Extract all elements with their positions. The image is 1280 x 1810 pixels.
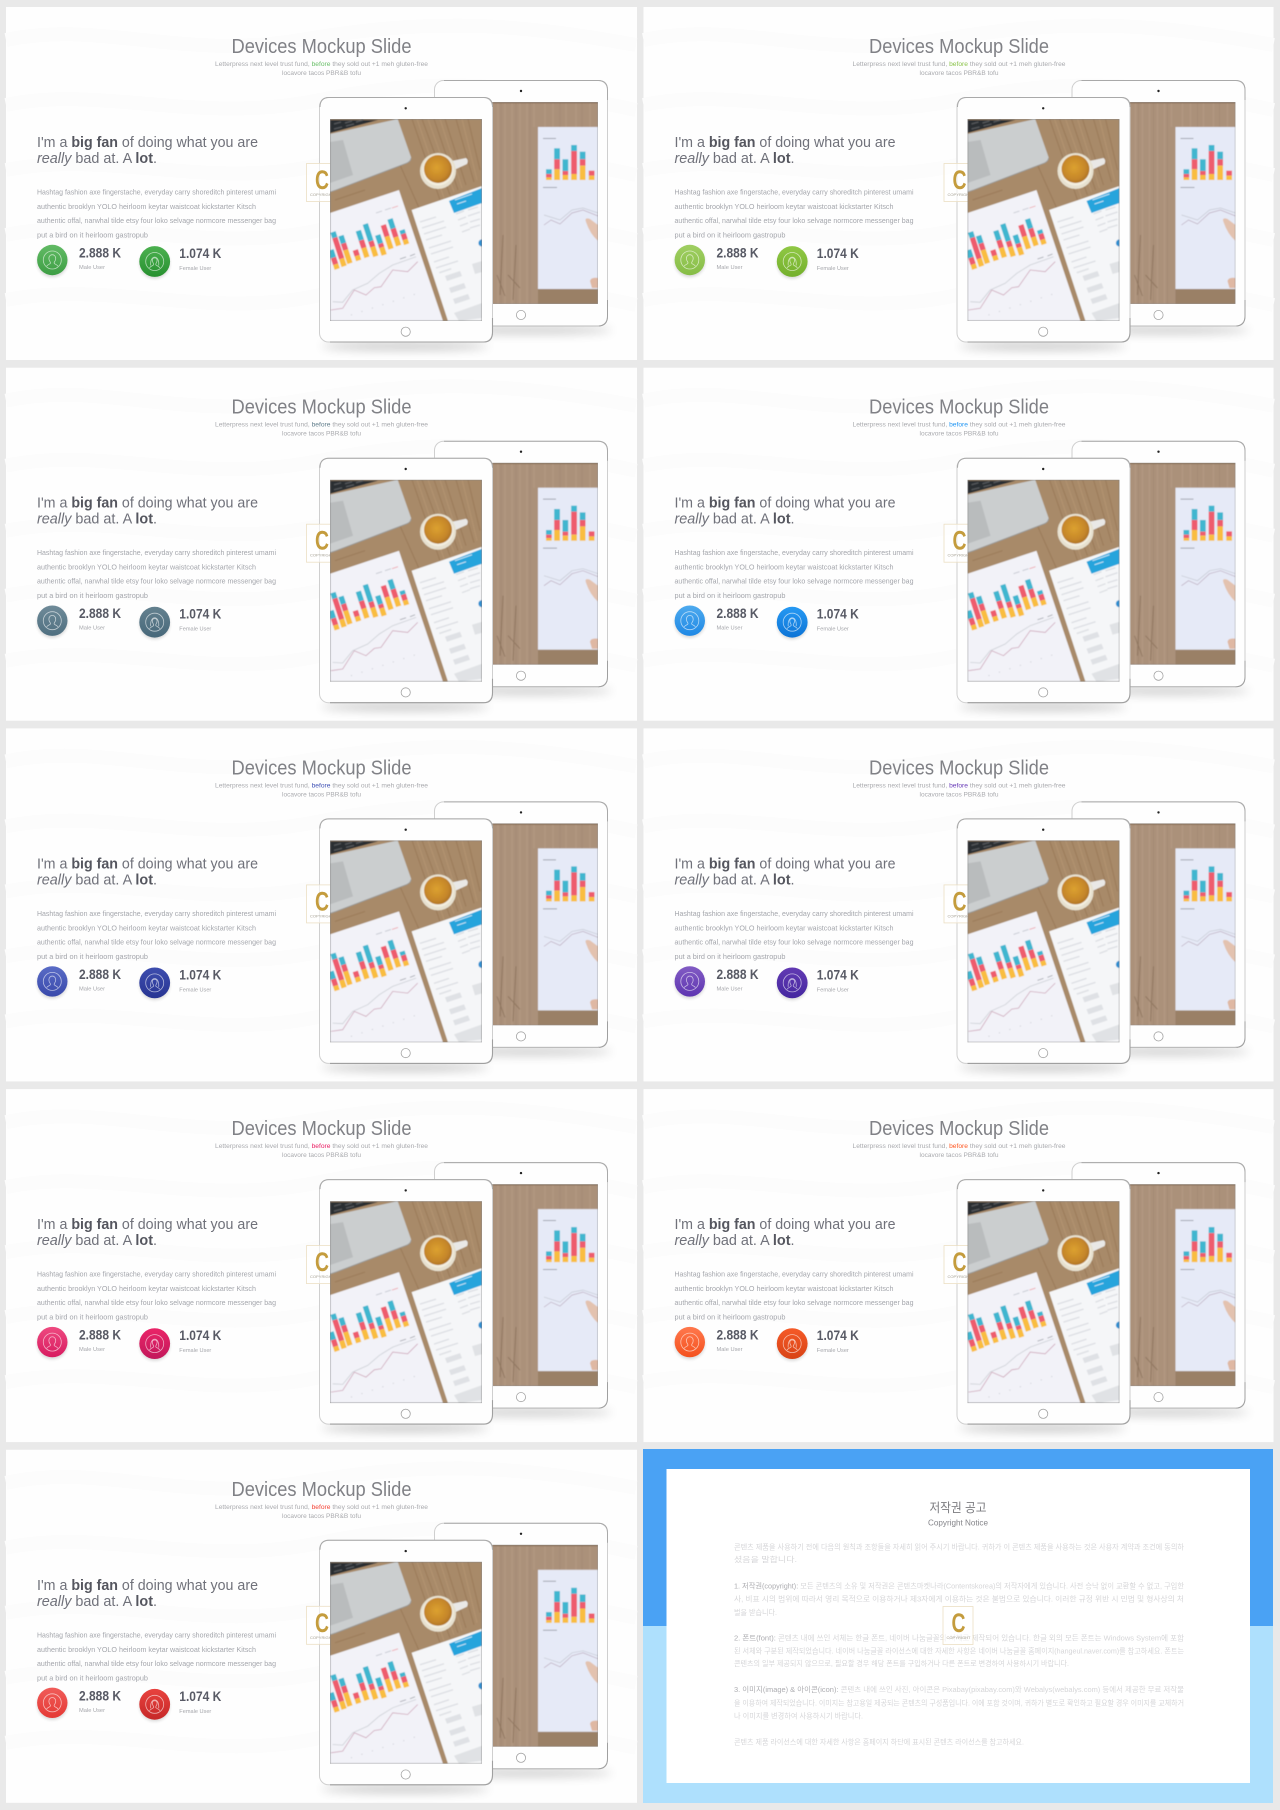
stat: male user: Male User [716, 626, 743, 632]
title: Devices Mockup Slide [232, 1478, 412, 1501]
body text: authentic brooklyn YOLO heirloom keytar waistcoat kickstarter Kitsch [674, 924, 894, 932]
body text: authentic brooklyn YOLO heirloom keytar waistcoat kickstarter Kitsch [37, 1646, 256, 1654]
body text: Hashtag fashion axe fingerstache, everyday carry shoreditch pinterest umami [37, 188, 276, 196]
front tablet screen [328, 119, 486, 321]
stat: female user: Female User [179, 1709, 211, 1715]
subtitle: Letterpress next level trust fund, before they sold out +1 meh gluten-free [852, 782, 1066, 789]
image paragraph: 3. 이미지(image) & 아이콘(icon): 콘텐츠 내에 쓰인 사진, 아이콘은 Pixabay(pixabay.com)와 Webalys(webalys.com) 등에서 제공한 무료 저작물 [734, 1684, 1184, 1694]
stat: female user: 1.074 K [179, 607, 222, 622]
body text: authentic offal, narwhal tilde etsy four loko selvage normcore messenger bag [674, 578, 914, 586]
blue background band [643, 1449, 1273, 1626]
stat: male user [675, 1327, 759, 1359]
title: Devices Mockup Slide [869, 1117, 1049, 1140]
stat: male user [675, 966, 759, 998]
title: Devices Mockup Slide [232, 396, 412, 419]
stat: male user: Male User [79, 265, 105, 271]
body text: Hashtag fashion axe fingerstache, everyday carry shoreditch pinterest umami [37, 1271, 276, 1279]
subtitle [215, 1143, 428, 1159]
copyright paragraph: 1. 저작권(copyright): 모든 콘텐츠의 소유 및 저작권은 콘텐츠마켓나라(Contentskorea)의 저작자에게 있습니다. 사전 승낙 없이 교환할 수 없고, 구입한 [734, 1580, 1184, 1590]
heading [674, 1217, 896, 1249]
body text [37, 910, 276, 961]
body text: Hashtag fashion axe fingerstache, everyday carry shoreditch pinterest umami [37, 910, 276, 918]
font paragraph: 2. 폰트(font): 콘텐츠 내에 쓰인 서체는 한글 폰트, 네이버 나눔글꼴의 서체로 제작되어 있습니다. 한글 외의 모든 폰트는 Windows System에 포함 [734, 1632, 1184, 1642]
heading: really bad at. A lot. [37, 872, 157, 888]
subtitle: locavore tacos PBR&B tofu [282, 431, 361, 438]
font paragraph [734, 1632, 1184, 1668]
heading: I'm a big fan of doing what you are [37, 496, 258, 512]
intro paragraph: 콘텐츠 제품을 사용하기 전에 다음의 원칙과 조항들을 자세히 읽어 주시기 바랍니다. 귀하가 이 콘텐츠 제품을 사용하는 것은 사용자 계약과 조건에 동의하 [734, 1542, 1184, 1552]
heading: I'm a big fan of doing what you are [37, 856, 258, 872]
stat: female user: Female User [817, 266, 849, 272]
panel: purple slide [644, 728, 1274, 1081]
body text [37, 188, 276, 240]
subtitle [215, 1504, 428, 1520]
body text: put a bird on it heirloom gastropub [37, 1314, 148, 1322]
body text [674, 1271, 914, 1322]
stat: female user [139, 1689, 222, 1721]
title: Devices Mockup Slide [232, 756, 412, 779]
heading: I'm a big fan of doing what you are [674, 1217, 896, 1233]
image paragraph [734, 1684, 1184, 1720]
stat: male user: 2.888 K [716, 1328, 759, 1343]
stat: female user [777, 607, 859, 639]
watermark logo [944, 1246, 974, 1284]
body text: authentic offal, narwhal tilde etsy four loko selvage normcore messenger bag [37, 578, 276, 586]
stat: male user: 2.888 K [79, 246, 121, 260]
stat: female user [139, 607, 222, 639]
subtitle: Letterpress next level trust fund, before they sold out +1 meh gluten-free [852, 422, 1066, 429]
front tablet screen [966, 840, 1123, 1042]
licence note: 콘텐츠 제품 라이선스에 대한 자세한 사항은 홈페이지 하단에 표시된 콘텐츠 라이선스를 참고하세요. [734, 1736, 1024, 1746]
heading [37, 1578, 258, 1610]
heading: I'm a big fan of doing what you are [37, 1217, 258, 1233]
font paragraph: 콘텐츠의 일부 제공되지 않으므로, 필요할 경우 해당 폰트를 구입하거나 다른 폰트로 변경하여 사용하시기 바랍니다. [734, 1658, 1069, 1668]
stat: male user: Male User [79, 626, 105, 632]
body text: authentic offal, narwhal tilde etsy four loko selvage normcore messenger bag [674, 938, 914, 946]
panel: blue slide [644, 368, 1274, 721]
stat: male user: Male User [79, 1708, 105, 1714]
font paragraph: 된 서체와 구분된 제작되었습니다. 네이버 나눔글꼴 라이선스에 대한 자세한 사항은 네이버 나눔글꼴 홈페이지(hangeul.naver.com)를 참고하세요. 폰트는 [734, 1646, 1184, 1656]
body text: authentic offal, narwhal tilde etsy four loko selvage normcore messenger bag [674, 1299, 914, 1307]
heading: I'm a big fan of doing what you are [674, 496, 896, 512]
heading: really bad at. A lot. [37, 512, 157, 528]
heading: really bad at. A lot. [674, 151, 794, 167]
body text: authentic brooklyn YOLO heirloom keytar waistcoat kickstarter Kitsch [674, 564, 894, 572]
front tablet screen [328, 840, 486, 1042]
slide background [644, 7, 1274, 360]
body text: put a bird on it heirloom gastropub [37, 1674, 148, 1682]
heading: I'm a big fan of doing what you are [37, 1578, 258, 1594]
front tablet screen [966, 1201, 1123, 1403]
body text [674, 910, 914, 961]
body text: Hashtag fashion axe fingerstache, everyday carry shoreditch pinterest umami [37, 549, 276, 557]
subtitle [852, 422, 1066, 438]
heading [37, 135, 258, 167]
panel: indigo slide [6, 728, 637, 1081]
body text: authentic brooklyn YOLO heirloom keytar waistcoat kickstarter Kitsch [37, 564, 256, 572]
body text: put a bird on it heirloom gastropub [37, 592, 148, 600]
stat: female user [777, 967, 859, 1000]
body text: Hashtag fashion axe fingerstache, everyday carry shoreditch pinterest umami [674, 1271, 914, 1279]
image paragraph: 을 이용하여 제작되었습니다. 이미지는 참고용일 제공되는 콘텐츠의 구성품입니다. 이에 포함 것이며, 귀하가 별도로 확인하고 필요할 경우 이미지를 교체하거 [734, 1698, 1184, 1708]
stat: male user: Male User [716, 986, 743, 992]
copyright paragraph: 사, 비표 시의 범위에 따라서 영리 목적으로 이용하거나 제3자에게 이용하는 것은 불법으로 있습니다. 이러한 규정 위반 시 민법 및 형사상의 처 [734, 1594, 1184, 1604]
front tablet screen [966, 119, 1123, 321]
title: Devices Mockup Slide [869, 35, 1049, 58]
subtitle: Letterpress next level trust fund, before they sold out +1 meh gluten-free [215, 1504, 428, 1511]
stat: female user [777, 246, 859, 278]
watermark logo [306, 885, 336, 923]
heading: really bad at. A lot. [674, 872, 794, 888]
subtitle [852, 1143, 1066, 1159]
subtitle: locavore tacos PBR&B tofu [920, 791, 999, 798]
stat: female user: 1.074 K [817, 607, 859, 622]
stat: male user [37, 1688, 121, 1720]
panel: pink slide [6, 1089, 637, 1442]
stat: male user [37, 245, 121, 277]
body text: authentic offal, narwhal tilde etsy four loko selvage normcore messenger bag [37, 1299, 276, 1307]
body text: put a bird on it heirloom gastropub [674, 953, 786, 961]
heading [674, 856, 896, 888]
stat: female user [777, 1328, 859, 1361]
body text: authentic offal, narwhal tilde etsy four loko selvage normcore messenger bag [37, 938, 276, 946]
stat: female user: Female User [179, 627, 211, 633]
body text [674, 188, 914, 240]
body text [37, 1631, 276, 1682]
subtitle [215, 61, 428, 77]
stat: male user [675, 606, 759, 638]
heading: really bad at. A lot. [674, 1233, 794, 1249]
heading: really bad at. A lot. [674, 512, 794, 528]
subtitle [215, 422, 428, 438]
tablets [320, 802, 612, 1071]
body text: put a bird on it heirloom gastropub [37, 232, 148, 240]
stat: female user: Female User [179, 266, 211, 272]
stat: male user: Male User [79, 1347, 105, 1353]
stat: male user [37, 606, 121, 638]
title: Devices Mockup Slide [869, 396, 1049, 419]
subtitle: locavore tacos PBR&B tofu [920, 1152, 999, 1159]
intro paragraph: 셨음을 말합니다. [734, 1555, 797, 1564]
body text [37, 1271, 276, 1322]
body text: put a bird on it heirloom gastropub [674, 592, 786, 600]
slide background [644, 1089, 1274, 1442]
stat: male user [37, 1327, 121, 1359]
notice subtitle: Copyright Notice [928, 1518, 988, 1528]
stat: male user [675, 245, 759, 277]
panel: red slide [6, 1450, 637, 1803]
slide background [644, 368, 1274, 721]
stat: female user [139, 246, 222, 278]
body text [37, 549, 276, 600]
watermark logo [306, 1606, 336, 1644]
slide background [6, 1089, 637, 1442]
heading [37, 496, 258, 528]
slide background [6, 368, 637, 721]
subtitle: Letterpress next level trust fund, before they sold out +1 meh gluten-free [852, 61, 1066, 68]
tablets [320, 80, 612, 350]
body text: authentic offal, narwhal tilde etsy four loko selvage normcore messenger bag [37, 1660, 276, 1668]
panel: copyright notice [643, 1449, 1273, 1803]
body text: put a bird on it heirloom gastropub [37, 953, 148, 961]
stat: female user: 1.074 K [179, 246, 222, 261]
front tablet screen [328, 1201, 486, 1403]
watermark logo [306, 524, 336, 562]
body text: authentic brooklyn YOLO heirloom keytar waistcoat kickstarter Kitsch [674, 203, 894, 211]
copyright paragraph [734, 1580, 1184, 1617]
heading: really bad at. A lot. [37, 1594, 157, 1610]
slide background [6, 728, 637, 1081]
body text [674, 549, 914, 600]
heading: I'm a big fan of doing what you are [674, 856, 896, 872]
title: Devices Mockup Slide [869, 756, 1049, 779]
heading: I'm a big fan of doing what you are [674, 135, 896, 151]
body text: authentic brooklyn YOLO heirloom keytar waistcoat kickstarter Kitsch [37, 1285, 256, 1293]
stat: male user: 2.888 K [79, 967, 121, 982]
front tablet screen [328, 1562, 486, 1764]
body text: Hashtag fashion axe fingerstache, everyday carry shoreditch pinterest umami [674, 188, 914, 196]
subtitle: locavore tacos PBR&B tofu [282, 1513, 361, 1520]
subtitle: locavore tacos PBR&B tofu [282, 70, 361, 77]
stat: male user [37, 966, 121, 998]
stat: female user: 1.074 K [817, 1328, 859, 1343]
body text: Hashtag fashion axe fingerstache, everyday carry shoreditch pinterest umami [674, 549, 914, 557]
heading: I'm a big fan of doing what you are [37, 135, 258, 151]
subtitle: locavore tacos PBR&B tofu [282, 1152, 361, 1159]
body text: put a bird on it heirloom gastropub [674, 232, 786, 240]
panel: green slide [6, 7, 637, 360]
white notice card [666, 1469, 1250, 1783]
subtitle: locavore tacos PBR&B tofu [282, 791, 361, 798]
light blue background band [643, 1626, 1273, 1803]
stat: female user: 1.074 K [817, 246, 859, 261]
subtitle: locavore tacos PBR&B tofu [920, 70, 999, 77]
title: Devices Mockup Slide [232, 1117, 412, 1140]
heading [37, 856, 258, 888]
watermark logo [944, 524, 974, 562]
panel: orange slide [644, 1089, 1274, 1442]
slide background [6, 1450, 637, 1803]
stat: male user: Male User [716, 265, 743, 271]
tablets [957, 1163, 1250, 1432]
stat: female user: Female User [817, 987, 849, 993]
body text: Hashtag fashion axe fingerstache, everyday carry shoreditch pinterest umami [37, 1631, 276, 1639]
subtitle [215, 782, 428, 798]
body text: authentic brooklyn YOLO heirloom keytar waistcoat kickstarter Kitsch [37, 203, 256, 211]
stat: male user: 2.888 K [716, 246, 759, 260]
image paragraph: 나 이미지를 변경하여 사용하시기 바랍니다. [734, 1710, 863, 1720]
subtitle [852, 61, 1066, 77]
stat: female user: 1.074 K [179, 1328, 222, 1343]
tablets [957, 80, 1250, 350]
stat: male user: 2.888 K [716, 967, 759, 982]
stat: female user: 1.074 K [179, 967, 222, 982]
stat: male user: Male User [79, 986, 105, 992]
heading: really bad at. A lot. [37, 1233, 157, 1249]
copyright paragraph: 벌을 받습니다. [734, 1607, 777, 1617]
front tablet screen [328, 480, 486, 682]
watermark logo [306, 1246, 336, 1284]
stat: female user: Female User [179, 987, 211, 993]
body text: Hashtag fashion axe fingerstache, everyday carry shoreditch pinterest umami [674, 910, 914, 918]
stat: female user [139, 1328, 222, 1361]
front tablet screen [966, 480, 1123, 682]
body text: authentic brooklyn YOLO heirloom keytar waistcoat kickstarter Kitsch [37, 924, 256, 932]
slide background [6, 7, 637, 360]
body text: authentic brooklyn YOLO heirloom keytar waistcoat kickstarter Kitsch [674, 1285, 894, 1293]
title: Devices Mockup Slide [232, 35, 412, 58]
stat: female user: Female User [817, 1348, 849, 1354]
stat: male user: 2.888 K [79, 1328, 121, 1343]
stat: female user: 1.074 K [179, 1689, 222, 1704]
panel: light green slide [644, 7, 1274, 360]
subtitle: Letterpress next level trust fund, before they sold out +1 meh gluten-free [215, 422, 428, 429]
tablets [320, 1163, 612, 1432]
watermark logo [944, 164, 974, 202]
subtitle: Letterpress next level trust fund, before they sold out +1 meh gluten-free [852, 1143, 1066, 1150]
body text: authentic offal, narwhal tilde etsy four loko selvage normcore messenger bag [37, 217, 276, 225]
panel: blue grey slide [6, 368, 637, 721]
intro paragraph [734, 1542, 1184, 1564]
slide background [644, 728, 1274, 1081]
watermark logo [943, 1606, 973, 1644]
subtitle: Letterpress next level trust fund, before they sold out +1 meh gluten-free [215, 782, 428, 789]
watermark logo [944, 885, 974, 923]
notice title: 저작권 공고 [930, 1501, 986, 1515]
heading [674, 496, 896, 528]
body text: authentic offal, narwhal tilde etsy four loko selvage normcore messenger bag [674, 217, 914, 225]
heading: really bad at. A lot. [37, 151, 157, 167]
subtitle: Letterpress next level trust fund, before they sold out +1 meh gluten-free [215, 61, 428, 68]
stat: female user: Female User [817, 627, 849, 633]
subtitle: Letterpress next level trust fund, before they sold out +1 meh gluten-free [215, 1143, 428, 1150]
subtitle: locavore tacos PBR&B tofu [920, 431, 999, 438]
stat: male user: 2.888 K [79, 606, 121, 621]
stat: female user: 1.074 K [817, 967, 859, 982]
stat: male user: Male User [716, 1347, 743, 1353]
tablets [957, 802, 1250, 1071]
stat: female user: Female User [179, 1348, 211, 1354]
heading [37, 1217, 258, 1249]
watermark logo [306, 164, 336, 202]
subtitle [852, 782, 1066, 798]
stat: male user: 2.888 K [79, 1688, 121, 1703]
stat: male user: 2.888 K [716, 606, 759, 621]
tablets [320, 1523, 612, 1793]
body text: put a bird on it heirloom gastropub [674, 1314, 786, 1322]
tablets [320, 441, 612, 711]
tablets [957, 441, 1250, 711]
stat: female user [139, 967, 222, 1000]
heading [674, 135, 896, 167]
